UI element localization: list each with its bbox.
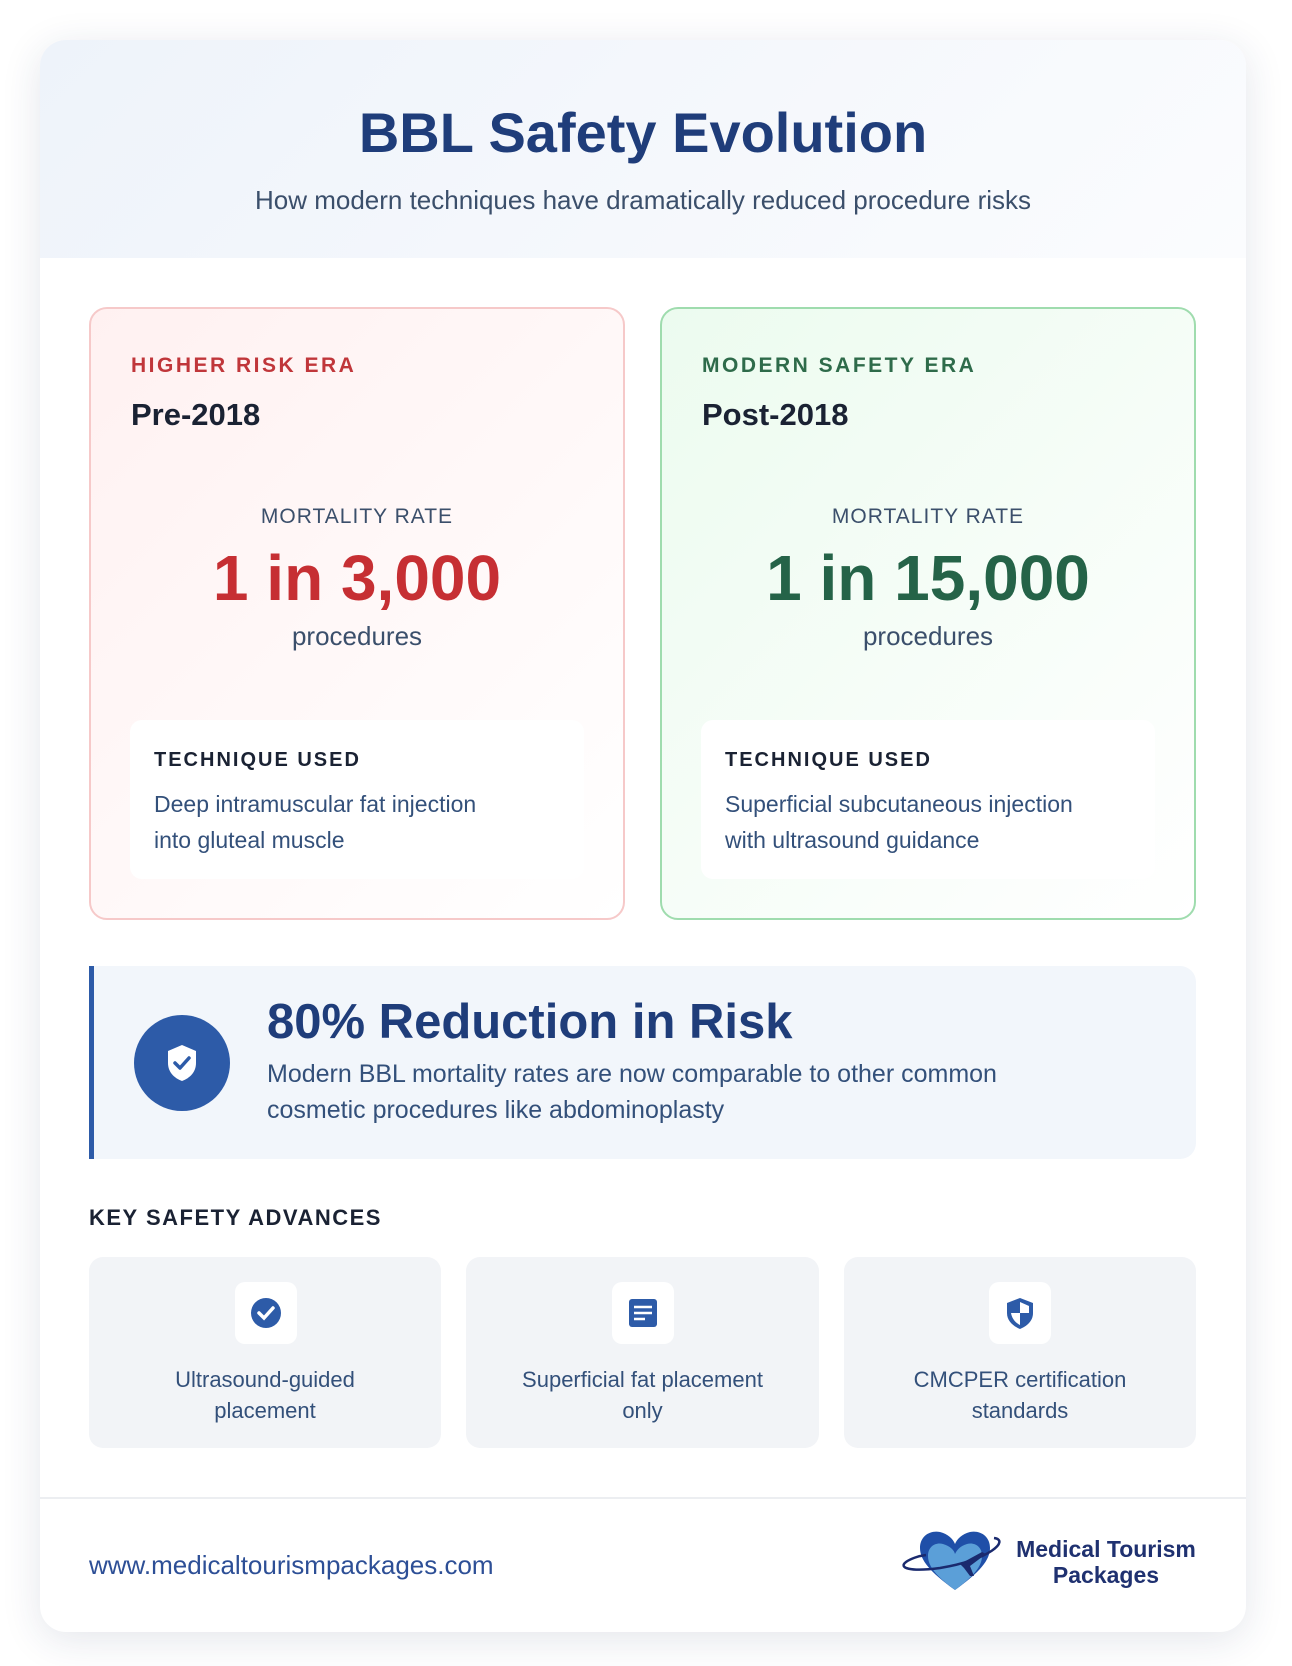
advance card: certification: CMCPER certification — [914, 1367, 1126, 1392]
logo — [902, 1532, 1196, 1590]
icon: check — [235, 1282, 297, 1344]
mortality value: 1 in 15,000 — [766, 542, 1090, 614]
procedures: procedures — [863, 621, 993, 651]
technique box: TECHNIQUE USED — [154, 749, 361, 771]
panel: post-2018 — [660, 307, 1196, 920]
title: BBL Safety Evolution — [359, 101, 927, 164]
technique box: with ultrasound guidance — [725, 827, 979, 853]
mortality value: 1 in 3,000 — [213, 542, 501, 614]
icon: document — [612, 1282, 674, 1344]
callout text: cosmetic procedures like abdominoplasty — [267, 1096, 724, 1124]
callout text: Modern BBL mortality rates are now comparable to other common — [267, 1060, 997, 1088]
icon: heart plane — [902, 1532, 1001, 1590]
callout text — [267, 1060, 997, 1124]
advance card: ultrasound — [89, 1257, 441, 1448]
advance card: superficial: Superficial fat placement — [522, 1367, 763, 1392]
technique box: Superficial subcutaneous injection — [725, 791, 1073, 817]
mortality label: MORTALITY RATE — [832, 505, 1024, 528]
advance card: certification — [844, 1257, 1196, 1448]
icon: shield small — [989, 1282, 1051, 1344]
callout heading: 80% Reduction in Risk — [267, 995, 793, 1049]
section heading: KEY SAFETY ADVANCES — [89, 1205, 382, 1230]
footer url: www.medicaltourismpackages.com — [89, 1550, 494, 1580]
subtitle: How modern techniques have dramatically reduced procedure risks — [255, 185, 1031, 215]
era label: MODERN SAFETY ERA — [702, 354, 976, 377]
advance card: certification: standards — [972, 1398, 1068, 1423]
mortality label: MORTALITY RATE — [261, 505, 453, 528]
footer divider — [40, 1497, 1246, 1499]
technique box: Deep intramuscular fat injection — [154, 791, 476, 817]
header band — [40, 40, 1246, 258]
era year: Post-2018 — [702, 397, 848, 432]
panel: pre-2018 — [89, 307, 625, 920]
era year: Pre-2018 — [131, 397, 260, 432]
technique box — [701, 720, 1155, 879]
advance card: superficial: only — [622, 1398, 663, 1423]
technique box: into gluteal muscle — [154, 827, 344, 853]
logo text: Packages — [1053, 1562, 1159, 1588]
advance card: ultrasound: placement — [214, 1398, 316, 1423]
logo text — [1016, 1536, 1196, 1588]
advance card: superficial — [466, 1257, 819, 1448]
procedures: procedures — [292, 621, 422, 651]
callout: 80% reduction — [89, 966, 1196, 1159]
advance card: ultrasound: Ultrasound-guided — [175, 1367, 355, 1392]
era label: HIGHER RISK ERA — [131, 354, 356, 377]
technique box: TECHNIQUE USED — [725, 749, 932, 771]
icon: shield — [134, 1015, 230, 1111]
logo text: Medical Tourism — [1016, 1536, 1196, 1562]
technique box — [130, 720, 584, 879]
